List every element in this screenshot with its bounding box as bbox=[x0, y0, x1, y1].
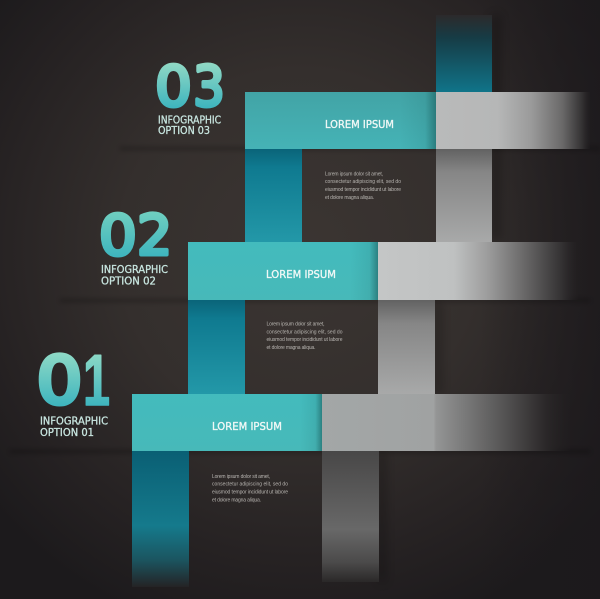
caption 02: OPTION 02 bbox=[101, 276, 156, 288]
vertical ribbon: teal under band 03 bbox=[245, 149, 302, 242]
caption 01: INFOGRAPHIC bbox=[40, 416, 108, 428]
option 01 label bbox=[37, 341, 110, 439]
paragraph 01: Lorem ipsum dolor sit amet, bbox=[212, 474, 270, 480]
vertical ribbon: gray under band 03 bbox=[436, 149, 492, 242]
number 01: 0 bbox=[37, 344, 82, 419]
paragraph 02: consectetur adipiscing elit, sed do bbox=[266, 330, 343, 336]
paragraph 03: eiusmod tempor incididunt ut labore bbox=[325, 187, 401, 193]
paragraph 01: consectetur adipiscing elit, sed do bbox=[212, 482, 288, 488]
caption 01: OPTION 01 bbox=[40, 427, 94, 439]
paragraph 02: eiusmod tempor incididunt ut labore bbox=[266, 337, 343, 343]
number 01: 1 bbox=[83, 341, 110, 421]
paragraph 02: et dolore magna aliqua. bbox=[266, 345, 316, 351]
paragraph 03: Lorem ipsum dolor sit amet, bbox=[325, 172, 383, 178]
band 03 title: LOREM IPSUM bbox=[325, 118, 394, 131]
vertical ribbon: gray under band 02 bbox=[378, 300, 435, 394]
vertical ribbon: gray under band 01 bbox=[322, 451, 379, 582]
band 02 bbox=[188, 242, 578, 300]
paragraph 01: eiusmod tempor incididunt ut labore bbox=[212, 490, 288, 496]
number 02: 0 bbox=[99, 204, 137, 268]
caption 03: INFOGRAPHIC bbox=[158, 114, 221, 126]
paragraph 02: Lorem ipsum dolor sit amet, bbox=[266, 322, 324, 328]
caption 03: OPTION 03 bbox=[158, 125, 210, 137]
band 01 bbox=[132, 394, 570, 451]
paragraph 03: et dolore magna aliqua. bbox=[325, 195, 374, 201]
number 02: 2 bbox=[137, 204, 172, 268]
number 01 bbox=[37, 341, 110, 421]
vertical ribbon: teal under band 01 bbox=[132, 451, 189, 587]
vertical ribbon: teal under band 02 bbox=[188, 300, 245, 394]
caption 02: INFOGRAPHIC bbox=[101, 264, 168, 276]
option 02 label bbox=[99, 204, 172, 288]
paragraph 01: et dolore magna aliqua. bbox=[212, 498, 261, 504]
number 03: 3 bbox=[193, 54, 225, 118]
vertical ribbon: top teal bbox=[436, 15, 492, 92]
paragraph 03: consectetur adipiscing elit, sed do bbox=[325, 179, 401, 185]
band 03 bbox=[245, 92, 590, 149]
band 02 title: LOREM IPSUM bbox=[266, 268, 336, 281]
option 03 label bbox=[155, 54, 225, 137]
number 03: 0 bbox=[155, 54, 192, 118]
band 01 title: LOREM IPSUM bbox=[212, 420, 282, 433]
